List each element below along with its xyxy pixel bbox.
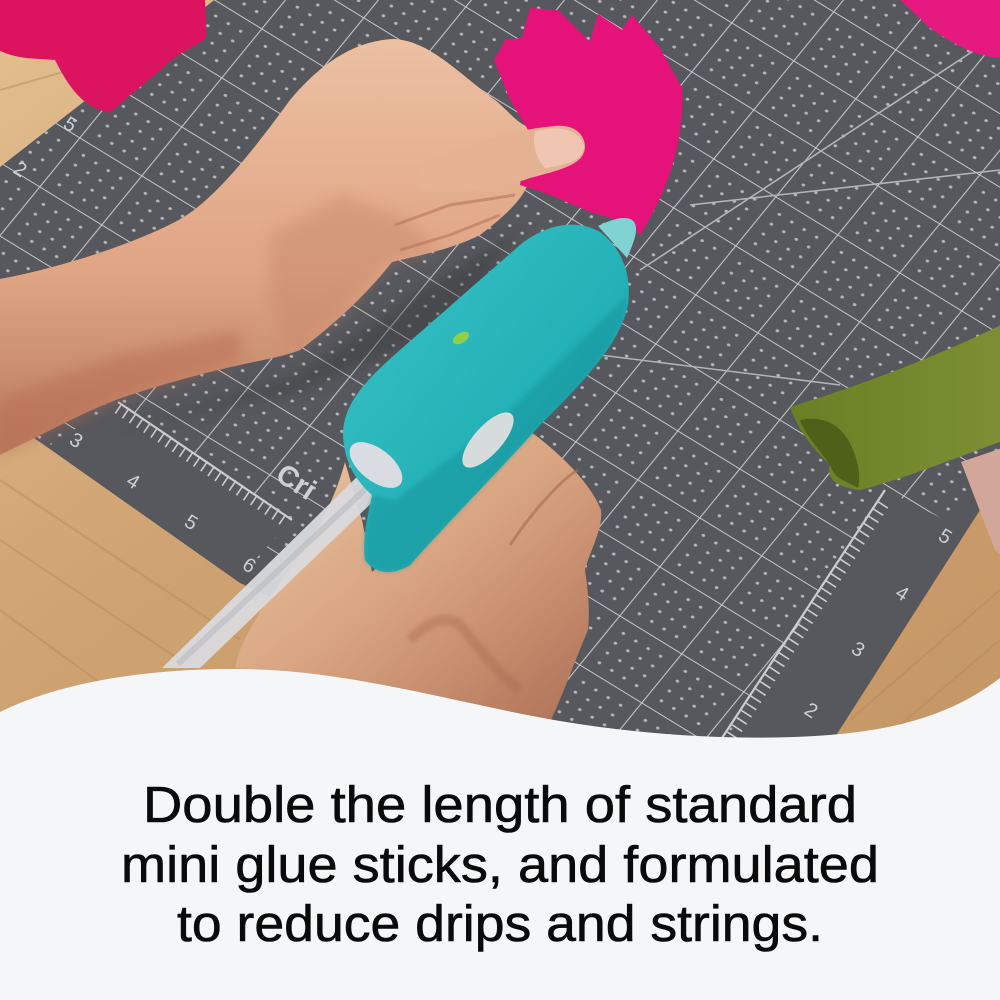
mat logo: Cri: [270, 458, 321, 507]
mat ruler numbers: 5: [180, 511, 201, 535]
mat ruler numbers: 2: [800, 699, 821, 723]
glue gun: [342, 218, 636, 572]
upper arm shadow on mat: [120, 230, 520, 430]
mat ruler numbers: 4: [891, 582, 912, 606]
caption text: [121, 776, 879, 952]
flower: top right: [895, 0, 1000, 58]
mat ruler numbers: 5: [59, 113, 80, 137]
upper hand and arm: [0, 39, 585, 457]
caption text: mini glue sticks, and formulated: [121, 836, 879, 893]
gun opening: [342, 433, 410, 497]
mat ruler numbers: 3: [847, 638, 868, 662]
lower hand: [235, 430, 601, 722]
white wave panel: [0, 669, 1000, 1000]
green crepe paper: [790, 323, 1000, 490]
thumb nail: [534, 128, 584, 168]
mat ruler numbers: 6: [238, 554, 259, 578]
mat ruler numbers: 2: [9, 158, 30, 182]
pink wood block: [961, 447, 1000, 560]
crepe paper flower in hand: [494, 8, 682, 235]
cutting mat: [0, 0, 1000, 745]
mat ruler ticks: [118, 402, 886, 738]
nozzle: [598, 218, 636, 258]
green indicator: [451, 329, 471, 347]
thumb over petal: [420, 126, 585, 192]
mat ruler numbers: 5: [934, 525, 955, 549]
grey button: [454, 405, 522, 475]
gun body: [343, 225, 629, 572]
wood table background: [0, 0, 1000, 760]
caption text: to reduce drips and strings.: [177, 895, 823, 952]
clear glue stick: [162, 472, 385, 668]
caption text: Double the length of standard: [143, 776, 857, 833]
flower: top left: [0, 0, 206, 113]
mat ruler numbers: [9, 113, 955, 723]
mat ruler numbers: 3: [65, 429, 86, 453]
mat ruler numbers: 4: [122, 470, 143, 494]
